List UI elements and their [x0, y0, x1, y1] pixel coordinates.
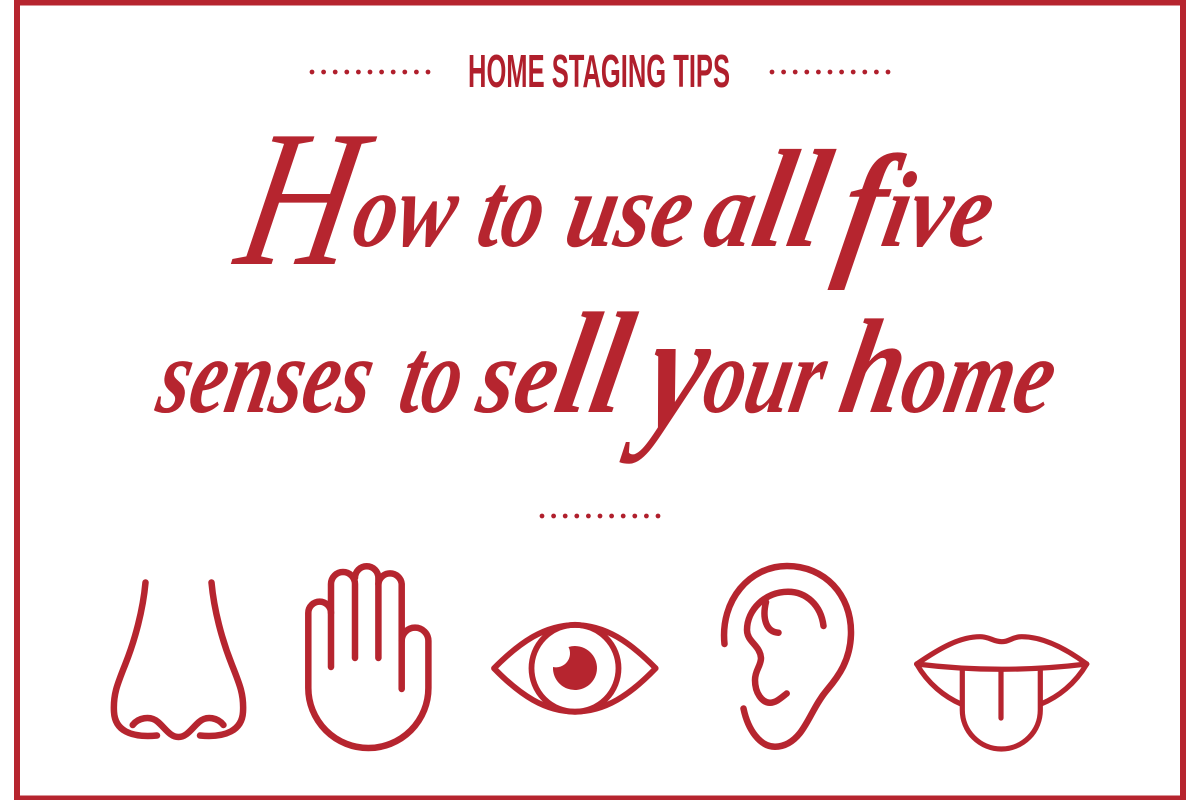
- title line 1: all: [694, 121, 843, 277]
- title line 2: sell: [467, 283, 645, 444]
- title line 1: ow: [344, 150, 470, 270]
- title line 2: senses: [149, 316, 385, 436]
- title line 1: use: [557, 150, 705, 270]
- dotted rule: top left: [312, 70, 428, 74]
- dotted rule: top right: [772, 70, 888, 74]
- title line 1: ive: [874, 150, 1005, 270]
- title line 1: to: [469, 150, 557, 270]
- icon: tongue and lips: [917, 637, 1087, 749]
- icon: nose: [114, 582, 243, 737]
- heading: home staging tips: HOME STAGING TIPS: [468, 45, 730, 97]
- icon: ear: [724, 566, 851, 747]
- title line 1: H: [222, 91, 386, 307]
- title line 2: our: [695, 316, 838, 436]
- title line 2: [149, 276, 1071, 465]
- icon: eye: [494, 625, 656, 712]
- title line 1: [222, 91, 1010, 307]
- title line 2: home: [830, 293, 1071, 442]
- title line 2: y: [618, 276, 726, 465]
- title line 1: f: [827, 124, 913, 291]
- icon: hand: [308, 566, 428, 748]
- title line 2: to: [391, 316, 475, 436]
- dotted rule: below title: [542, 514, 658, 518]
